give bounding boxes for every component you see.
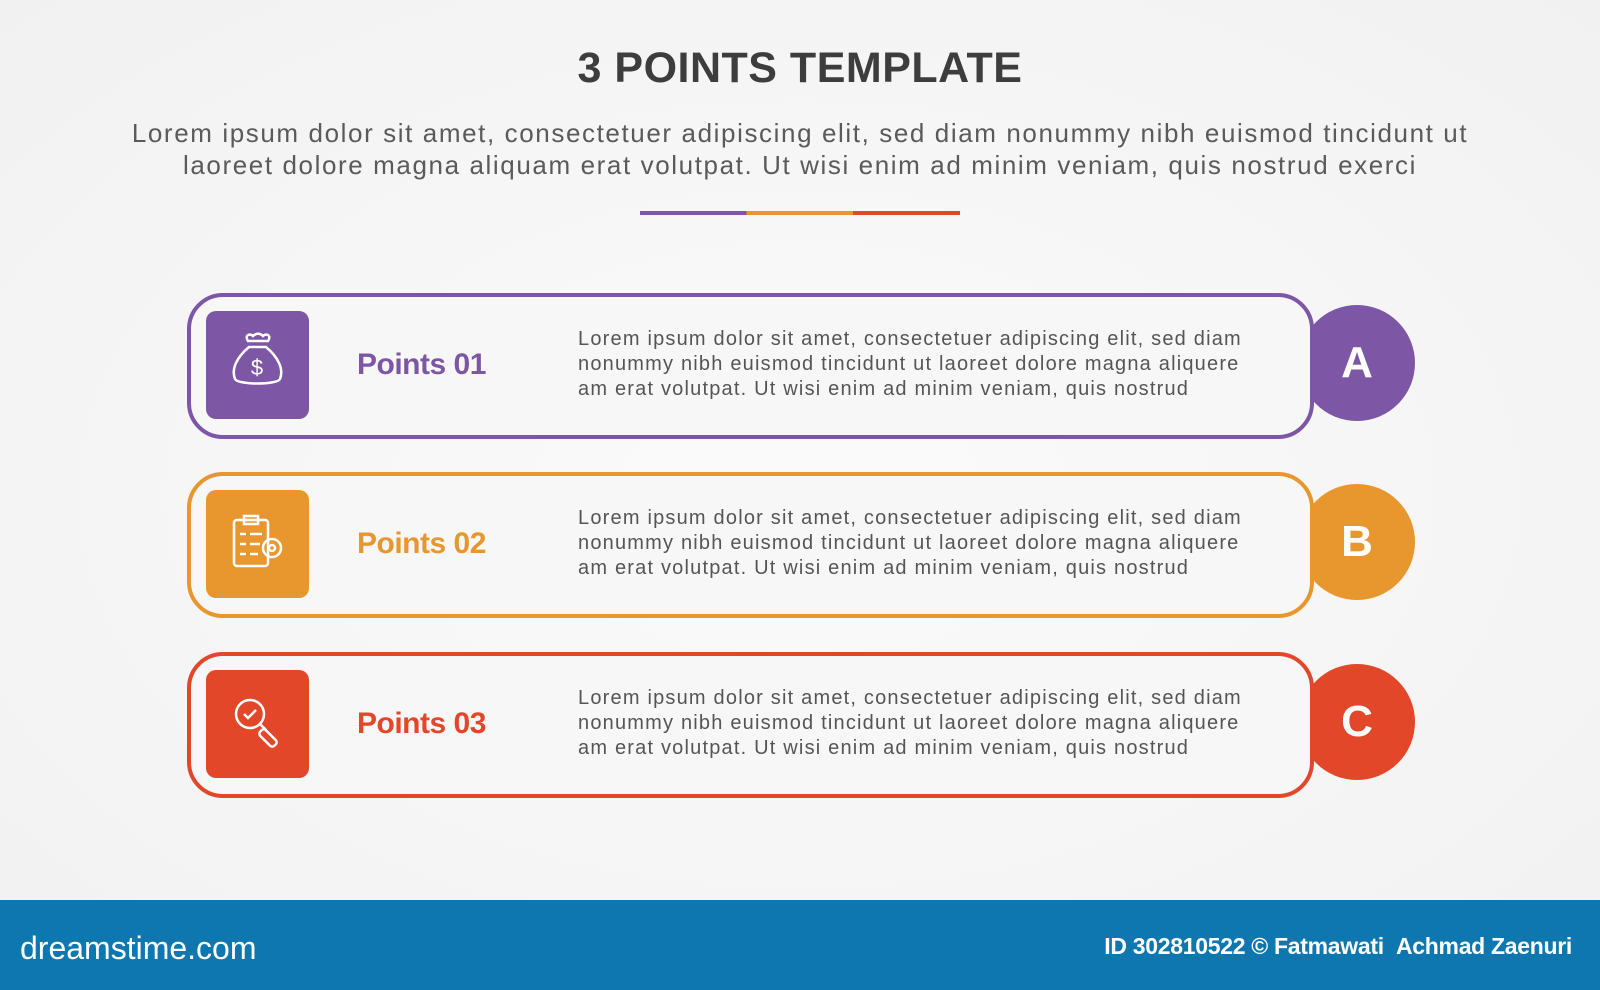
circle C xyxy=(1299,664,1415,780)
text xyxy=(578,687,1242,759)
text: am erat volutpat. Ut wisi enim ad minim veniam, quis nostrud xyxy=(578,378,1189,400)
text: nonummy nibh euismod tincidunt ut laoreet dolore magna aliquere xyxy=(578,532,1240,554)
circle A: A xyxy=(1341,338,1373,387)
text: Lorem ipsum dolor sit amet, consectetuer adipiscing elit, sed diam xyxy=(578,687,1242,709)
row 1 xyxy=(187,293,1415,439)
footer logo: dreamstime.com xyxy=(20,930,256,966)
row 3 xyxy=(187,652,1415,798)
subtitle: laoreet dolore magna aliquam erat volutpat. Ut wisi enim ad minim veniam, quis nostrud exerci xyxy=(183,150,1417,180)
footer xyxy=(0,900,1600,990)
text: Lorem ipsum dolor sit amet, consectetuer adipiscing elit, sed diam xyxy=(578,328,1242,350)
subtitle: Lorem ipsum dolor sit amet, consectetuer adipiscing elit, sed diam nonummy nibh euismod tincidunt ut xyxy=(132,118,1468,148)
icon: magnifier xyxy=(206,670,309,778)
divider xyxy=(640,211,960,215)
circle B: B xyxy=(1341,517,1373,566)
row 2 xyxy=(187,472,1415,618)
label: Points 02 xyxy=(357,527,486,560)
icon: clipboard gear xyxy=(206,490,309,598)
subtitle xyxy=(132,118,1468,180)
circle A xyxy=(1299,305,1415,421)
footer credit: ID 302810522 © Fatmawati Achmad Zaenuri xyxy=(1104,933,1572,959)
label: Points 01 xyxy=(357,348,486,381)
text: am erat volutpat. Ut wisi enim ad minim veniam, quis nostrud xyxy=(578,737,1189,759)
text xyxy=(578,507,1242,579)
circle B xyxy=(1299,484,1415,600)
icon: money bag xyxy=(206,311,309,419)
text: am erat volutpat. Ut wisi enim ad minim veniam, quis nostrud xyxy=(578,557,1189,579)
circle C: C xyxy=(1341,697,1373,746)
text: nonummy nibh euismod tincidunt ut laoreet dolore magna aliquere xyxy=(578,712,1240,734)
box 3 xyxy=(187,652,1314,798)
label: Points 03 xyxy=(357,707,486,740)
text: Lorem ipsum dolor sit amet, consectetuer adipiscing elit, sed diam xyxy=(578,507,1242,529)
icon: money bag: $ xyxy=(251,355,263,380)
title: 3 POINTS TEMPLATE xyxy=(578,44,1022,92)
text: nonummy nibh euismod tincidunt ut laoreet dolore magna aliquere xyxy=(578,353,1240,375)
box 2 xyxy=(187,472,1314,618)
text xyxy=(578,328,1242,400)
box 1 xyxy=(187,293,1314,439)
